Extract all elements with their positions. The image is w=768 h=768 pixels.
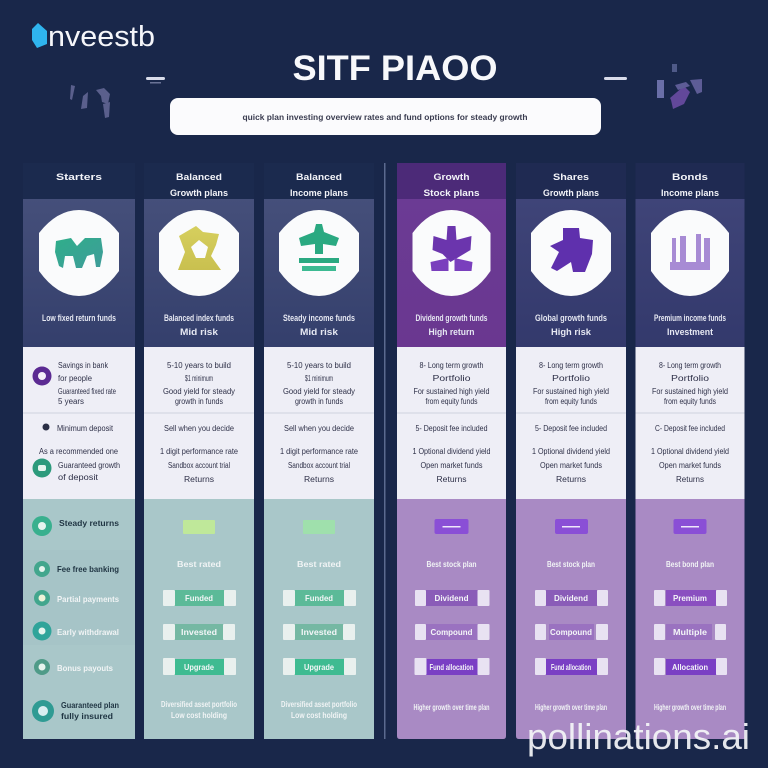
details text: Guaranteed growth: [58, 461, 120, 470]
details: top: Portfolio: [432, 374, 471, 383]
pill row: Fund allocation: [430, 663, 474, 672]
logo: [32, 21, 155, 53]
details: top: from equity funds: [545, 397, 597, 406]
pill row: Compound: [430, 628, 473, 637]
pill row: Premium: [673, 594, 707, 603]
panel caption: [283, 313, 355, 337]
details: bottom: [32, 424, 120, 482]
feature row: fully insured: [61, 711, 113, 721]
details: top: For sustained high yield: [533, 387, 609, 396]
details: top: [414, 361, 490, 406]
icon: purple heart badge: [32, 366, 52, 386]
column heading: [290, 172, 348, 198]
details: top: For sustained high yield: [414, 387, 490, 396]
details text: Guaranteed fixed rate: [58, 387, 116, 396]
details: bottom: Returns: [184, 475, 214, 484]
panel caption: [416, 313, 488, 337]
details: top: [652, 361, 728, 406]
details: bottom: 1 Optional dividend yield: [532, 447, 610, 456]
details: bottom: [651, 424, 729, 484]
icon: badge: [279, 210, 359, 296]
pill row: Upgrade: [304, 663, 335, 672]
column heading: [661, 172, 719, 198]
details: bottom: 1 digit performance rate: [160, 447, 238, 456]
feature row: Guaranteed plan: [61, 700, 119, 710]
pill row: [535, 624, 608, 640]
feature label: Best stock plan: [547, 559, 595, 569]
panel caption: [164, 313, 234, 337]
details: bottom: Sandbox account trial: [168, 461, 230, 470]
details: top: 8- Long term growth: [659, 361, 721, 370]
details: top: 8- Long term growth: [539, 361, 603, 370]
feature row: [34, 659, 113, 675]
pill row: Multiple: [673, 628, 708, 637]
panel: column 1: [23, 163, 135, 739]
feature row: [32, 622, 119, 640]
panel caption: Investment: [667, 327, 713, 337]
details: bottom: [280, 424, 358, 484]
details: bottom: 5- Deposit fee included: [416, 424, 488, 433]
panel: column 6: [636, 163, 744, 739]
column heading: [543, 172, 599, 198]
panel caption: Premium income funds: [654, 313, 726, 323]
icon: small dot: [42, 424, 50, 430]
details: bottom: 5- Deposit fee included: [535, 424, 607, 433]
pill row: [283, 590, 356, 606]
pill row: [163, 658, 236, 675]
button: [183, 520, 215, 534]
details: bottom: 1 digit performance rate: [280, 447, 358, 456]
panel caption: High return: [428, 327, 474, 337]
details: bottom: 1 Optional dividend yield: [651, 447, 729, 456]
icon: badge: [159, 210, 239, 296]
footer note: [281, 699, 357, 720]
pill row: Dividend: [554, 594, 588, 603]
panel caption: Global growth funds: [535, 313, 607, 323]
details: top: For sustained high yield: [652, 387, 728, 396]
details text: [58, 361, 116, 406]
logo wordmark: nveestb: [48, 21, 155, 53]
column heading: [170, 172, 228, 198]
panel: column 4: [397, 163, 506, 739]
footer note: Low cost holding: [171, 710, 227, 720]
details: top: Good yield for steady: [283, 387, 355, 396]
pill row: Dividend: [434, 594, 469, 603]
feature row: [32, 700, 119, 722]
column heading: Bonds: [672, 172, 708, 182]
panel caption: Steady income funds: [283, 313, 355, 323]
details: bottom: Open market funds: [540, 461, 602, 470]
feature row: Partial payments: [57, 594, 119, 604]
details: bottom: Sell when you decide: [164, 424, 235, 433]
details: bottom: [412, 424, 490, 484]
footer note: Low cost holding: [291, 710, 347, 720]
feature label: Best rated: [297, 559, 341, 569]
panel caption: Dividend growth funds: [416, 313, 488, 323]
details: bottom: [532, 424, 610, 484]
feature row: [34, 590, 119, 606]
pill row: [535, 590, 608, 606]
pill row: Funded: [185, 594, 213, 603]
column heading: Balanced: [296, 172, 342, 182]
details: bottom: [160, 424, 238, 484]
feature row: Early withdrawal: [57, 627, 119, 637]
details: top: from equity funds: [426, 397, 478, 406]
details: bottom: Open market funds: [659, 461, 721, 470]
feature row: Fee free banking: [57, 564, 119, 574]
column heading: Balanced: [176, 172, 222, 182]
feature label: Best stock plan: [426, 559, 476, 569]
feature row: Bonus payouts: [57, 663, 113, 673]
icon: badge: [531, 210, 611, 296]
pill row: [283, 658, 356, 675]
pill row: [415, 590, 490, 606]
feature label: Best bond plan: [666, 559, 714, 569]
details: top: 5-10 years to build: [167, 361, 231, 370]
details: top: growth in funds: [295, 397, 343, 406]
details: bottom: Returns: [556, 475, 586, 484]
panel caption: Balanced index funds: [164, 313, 234, 323]
details: bottom: 1 Optional dividend yield: [412, 447, 490, 456]
details: bottom: C- Deposit fee included: [655, 424, 725, 433]
details: top: 5-10 years to build: [287, 361, 351, 370]
details: top: Portfolio: [552, 374, 591, 383]
footer note: Higher growth over time plan: [535, 702, 607, 712]
pill row: [163, 624, 235, 640]
panel caption: Mid risk: [300, 327, 339, 337]
feature row: Steady returns: [59, 518, 119, 528]
details: top: Good yield for steady: [163, 387, 235, 396]
column heading: Income plans: [290, 188, 348, 198]
button: [303, 520, 335, 534]
panel: column 5: [516, 163, 626, 739]
pill row: Funded: [305, 594, 333, 603]
icon: logo gem: [32, 23, 47, 48]
pill row: Invested: [301, 628, 337, 637]
details: top: Portfolio: [671, 374, 710, 383]
list: features: [32, 516, 119, 722]
feature label: Best rated: [177, 559, 221, 569]
details line: Minimum deposit: [57, 424, 114, 433]
panel caption: Mid risk: [180, 327, 219, 337]
details: top: [32, 361, 116, 406]
details: top: $1 minimum: [185, 374, 213, 383]
pill row: [654, 624, 726, 640]
panel: column 3: [264, 163, 374, 739]
pill row: Allocation: [672, 663, 708, 672]
pill row: Invested: [181, 628, 217, 637]
details: top: 8- Long term growth: [420, 361, 484, 370]
decorative marks: left: [70, 77, 165, 118]
icon: green badge: [32, 458, 52, 478]
panel caption: Low fixed return funds: [42, 313, 116, 323]
pill row: [654, 590, 727, 606]
panel caption: High risk: [551, 327, 592, 337]
details: top: growth in funds: [175, 397, 223, 406]
details: top: [163, 361, 235, 406]
details: bottom: Returns: [436, 475, 467, 484]
button: [555, 519, 588, 534]
feature row: [34, 561, 119, 577]
icon: badge: [412, 210, 490, 296]
pill row: [654, 658, 727, 675]
column heading: Stock plans: [423, 188, 480, 198]
details line: As a recommended one: [39, 447, 119, 456]
details text: [58, 461, 120, 482]
footer note: Higher growth over time plan: [414, 702, 490, 712]
title: SITF PIAOO: [292, 49, 498, 88]
details: top: [533, 361, 609, 406]
pill row: [415, 624, 490, 640]
footer note: Diversified asset portfolio: [161, 699, 237, 709]
column heading: Growth plans: [543, 188, 599, 198]
column heading: Shares: [553, 172, 589, 182]
panel caption: [654, 313, 726, 337]
watermark: pollinations.ai: [527, 716, 750, 757]
details: bottom: Sell when you decide: [284, 424, 355, 433]
details: bottom: Returns: [304, 475, 334, 484]
column heading: Starters: [56, 172, 102, 182]
column heading: Income plans: [661, 188, 719, 198]
column heading: Growth: [434, 172, 470, 182]
details text: Savings in bank: [58, 361, 109, 370]
details text: for people: [58, 374, 93, 383]
icon: badge: [39, 210, 119, 296]
column heading: [424, 172, 480, 198]
details: bottom: Open market funds: [420, 461, 482, 470]
button: [434, 519, 468, 534]
button: [674, 519, 706, 534]
details: top: $1 minimum: [305, 374, 333, 383]
details: bottom: Returns: [676, 475, 704, 484]
pill row: [414, 658, 490, 675]
subtitle bar: [170, 98, 601, 135]
icon: badge: [651, 210, 729, 296]
footer note: Diversified asset portfolio: [281, 699, 357, 709]
feature row: [32, 516, 119, 536]
details: top: [283, 361, 355, 406]
details text: 5 years: [58, 397, 84, 406]
details text: of deposit: [58, 473, 99, 482]
pill row: [283, 624, 355, 640]
pill row: Fund allocation: [551, 663, 591, 672]
pill row: Upgrade: [184, 663, 215, 672]
subtitle bar: quick plan investing overview rates and fund options for steady growth: [242, 112, 528, 122]
decorative marks: right: [604, 64, 702, 109]
details: bottom: Sandbox account trial: [288, 461, 350, 470]
center divider: [384, 163, 386, 739]
panel caption: [535, 313, 607, 337]
details: top: from equity funds: [664, 397, 716, 406]
pill row: [163, 590, 236, 606]
column heading: Growth plans: [170, 188, 228, 198]
pill row: Compound: [550, 628, 592, 637]
footer note: [161, 699, 237, 720]
panel: column 2: [144, 163, 254, 739]
pill row: [535, 658, 608, 675]
